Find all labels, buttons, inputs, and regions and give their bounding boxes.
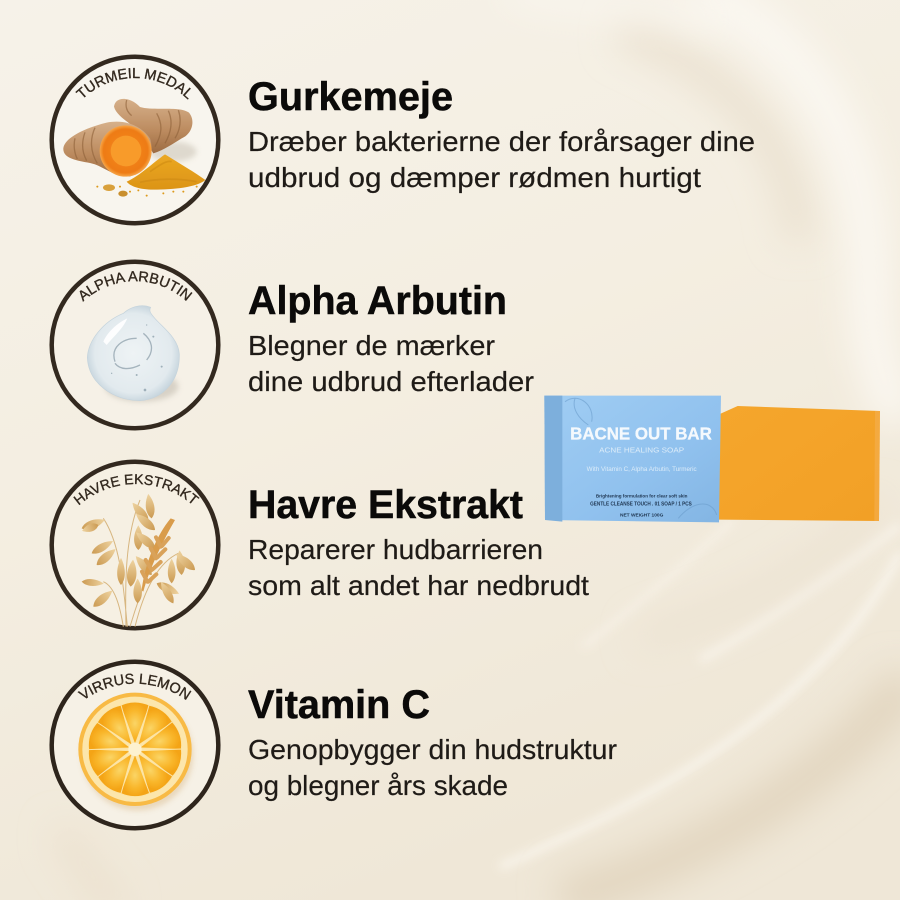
ingredient: vitamin c <box>49 660 617 830</box>
medal label: VIRRUS LEMON <box>78 674 192 700</box>
blue soap box: Brightening formulation for clear soft skin <box>596 493 688 498</box>
icon: oat medal <box>49 460 221 630</box>
heading: Havre Ekstrakt <box>248 483 523 527</box>
description: dine udbrud efterlader <box>248 366 534 397</box>
description: udbrud og dæmper rødmen hurtigt <box>248 162 701 193</box>
ingredient: turmeric <box>49 54 755 226</box>
description: Genopbygger din hudstruktur <box>248 734 617 765</box>
ingredient: havre ekstrakt <box>49 460 589 630</box>
medal label: ALPHA ARBUTIN <box>80 271 192 302</box>
ingredient: alpha arbutin <box>49 260 534 430</box>
blue soap box: BACNE OUT BAR <box>570 424 712 444</box>
blue soap box <box>544 396 721 522</box>
blue soap box: ACNE HEALING SOAP <box>599 446 684 455</box>
blue soap box: NET WEIGHT 100G <box>620 512 663 518</box>
blue soap box: With Vitamin C, Alpha Arbutin, Turmeric <box>587 466 697 473</box>
icon: alpha arbutin medal <box>49 260 221 430</box>
medal label: HAVRE EKSTRAKT <box>73 474 200 506</box>
heading: Gurkemeje <box>248 75 453 119</box>
heading: Alpha Arbutin <box>248 279 507 323</box>
icon: lemon medal <box>49 660 221 830</box>
description: og blegner års skade <box>248 770 508 801</box>
product: soap box and bar <box>544 396 880 522</box>
orange soap bar <box>719 406 880 521</box>
heading: Vitamin C <box>248 683 430 727</box>
icon: turmeric medal <box>49 54 221 226</box>
description: Reparerer hudbarrieren <box>248 534 543 565</box>
blue soap box: GENTLE CLEANSE TOUCH . 01 SOAP / 1 PCS <box>590 501 692 507</box>
description: som alt andet har nedbrudt <box>248 570 589 601</box>
description: Dræber bakterierne der forårsager dine <box>248 126 755 157</box>
medal label: TURMEIL MEDAL <box>75 68 191 100</box>
description: Blegner de mærker <box>248 330 495 361</box>
